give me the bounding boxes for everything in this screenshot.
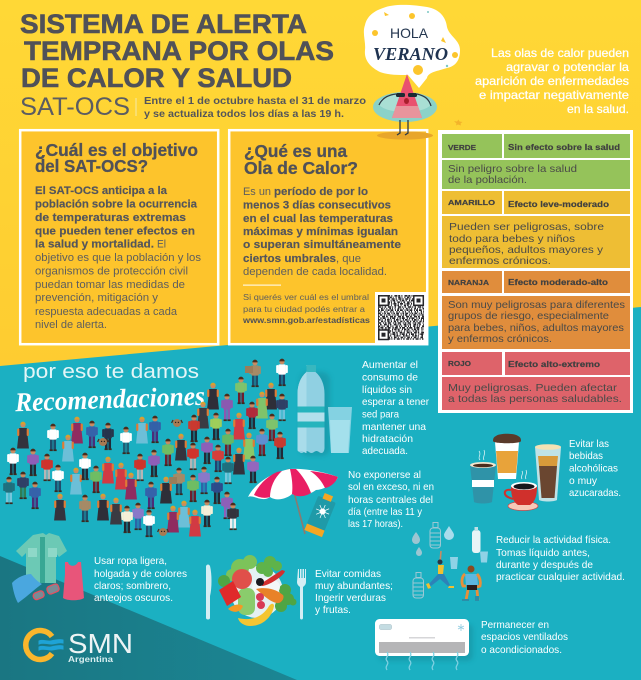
row: rojo <box>442 352 630 410</box>
text: liquidos: sed para <box>362 410 399 420</box>
row: verde <box>442 134 630 189</box>
text: objetivo body: que pueden tener efectos en <box>35 226 195 238</box>
decoration: small star <box>454 120 462 126</box>
icon: exercising woman <box>426 551 454 589</box>
text: sol: sol en exceso, ni en <box>348 482 434 493</box>
text: espacios: o acondicionados. <box>481 645 562 656</box>
text: liquidos: líquidos sin <box>362 385 412 396</box>
heading: ola de calor: Ola de Calor? <box>244 158 358 178</box>
text: ola de calor body: período de por lo <box>274 186 369 198</box>
row: naranja: grupos de riesgo, especialmente <box>448 311 609 322</box>
text: heat waves note: aparición de enfermedades <box>475 74 629 88</box>
row: amarillo: Efecto leve-moderado <box>508 199 609 209</box>
text: objetivo body: El <box>157 238 166 250</box>
text: comidas: y frutas. <box>315 605 351 616</box>
text: comidas <box>315 569 393 616</box>
row: naranja: para bebes, niños, adultos mayores <box>448 323 624 334</box>
icon: bottles, drops and glasses <box>412 522 488 598</box>
icon: glass of water <box>328 407 352 453</box>
icon: beach umbrella <box>248 469 338 534</box>
text: ropa: claros; sombrero, <box>94 581 171 592</box>
icon: sunscreen <box>304 491 338 537</box>
text: bebidas: bebidas <box>569 451 603 462</box>
logo: SMN Argentina <box>26 628 133 664</box>
text: liquidos <box>362 360 430 457</box>
row: rojo: Muy peligrosas. Pueden afectar <box>448 383 618 394</box>
icon: clothes <box>12 533 84 603</box>
QR code <box>375 292 428 345</box>
title: DE CALOR Y SALUD <box>21 63 292 93</box>
text: objetivo body: población sobre la ocurrencia <box>35 198 197 210</box>
text: bebidas <box>569 439 621 499</box>
text: liquidos: adecuada. <box>362 446 408 457</box>
table: alert levels <box>438 130 633 413</box>
text: heat waves note: agravar o potenciar la <box>506 60 629 74</box>
text: ola de calor body <box>243 186 401 278</box>
icon: salad plate <box>218 555 296 626</box>
text: sol: las 17 horas). <box>348 519 403 530</box>
text: ola de calor body: ciertos umbrales <box>243 253 336 265</box>
text: comidas: muy abundantes; <box>315 581 393 592</box>
text: umbral link <box>242 293 371 325</box>
row: rojo: Efecto alto-extremo <box>508 359 600 369</box>
panel: objetivo del SAT-OCS <box>20 130 218 344</box>
text: comidas: Evitar comidas <box>315 569 381 580</box>
row: amarillo: enfermos crónicos. <box>449 256 551 267</box>
row: verde: Sin peligro sobre la salud <box>448 164 577 175</box>
text: ola de calor body: máximas y mínimas igualan <box>243 226 398 238</box>
text: heat waves note: Las olas de calor pueden <box>491 46 629 60</box>
illustration: crowd of people <box>3 359 288 537</box>
text: heat waves note <box>475 46 629 116</box>
row: amarillo: pequeños, adultos mayores y <box>449 245 604 256</box>
text: bebidas: alcohólicas <box>569 464 618 474</box>
text: ola de calor body: menos 3 días consecutivos <box>243 200 391 212</box>
row: naranja: y enfermos crónicos. <box>448 334 552 345</box>
subtitle: y se actualiza todos los días a las 19 h. <box>144 108 344 120</box>
text: objetivo body: la salud y mortalidad. <box>35 238 154 250</box>
heading: objetivo <box>35 140 198 176</box>
text: objetivo body: puedan tomar las medidas de <box>35 279 185 291</box>
row: naranja: Efecto moderado-alto <box>508 277 608 287</box>
row: verde: de la población. <box>448 175 527 186</box>
heading: por eso te damos: por eso te damos <box>23 361 199 383</box>
text: ropa: holgada y de colores <box>94 569 187 580</box>
text: ropa <box>94 556 187 604</box>
heading: objetivo: ¿Cuál es el objetivo <box>35 140 198 160</box>
text: espacios: Permanecer en <box>481 620 549 631</box>
text: ola de calor body: dependen de cada localidad. <box>243 266 387 278</box>
text: objetivo body: objetivo es que la población y los <box>35 252 201 264</box>
row: naranja: NARANJA <box>448 278 490 287</box>
text: umbral link: para tu ciudad podés entrar a <box>243 305 366 314</box>
text: bebidas: Evitar las <box>569 439 609 450</box>
text: heat waves note: en la salud. <box>567 102 629 116</box>
row: rojo: ROJO <box>448 359 471 368</box>
illustration: hola verano bubble <box>364 5 460 88</box>
title <box>20 9 334 93</box>
logo: SMN Argentina: Argentina <box>68 654 113 664</box>
title: TEMPRANA POR OLAS <box>24 36 334 66</box>
illustration: hola verano bubble: HOLA <box>390 25 429 41</box>
heading: ola de calor: ¿Qué es una <box>244 141 347 161</box>
row: amarillo: todo para bebes y niños <box>449 234 575 245</box>
text: objetivo body: nivel de alerta. <box>35 319 107 331</box>
text: sol: No exponerse al <box>348 470 421 481</box>
row: amarillo <box>442 191 630 268</box>
heading: SAT-OCS: SAT-OCS <box>20 93 130 121</box>
text: liquidos: hidratación <box>362 434 413 445</box>
text: sol <box>348 470 434 530</box>
text: actividad fisica: practicar cualquier actividad. <box>496 572 625 583</box>
logo: SMN Argentina: SMN <box>68 628 133 659</box>
text: actividad fisica: Reducir la actividad física. <box>496 535 611 546</box>
background: dark teal corner <box>0 556 297 680</box>
row: amarillo: AMARILLO <box>448 198 495 207</box>
row: verde: Sin efecto sobre la salud <box>508 142 620 152</box>
text: heat waves note: e impactar negativamente <box>479 88 629 102</box>
text: actividad fisica <box>496 535 625 583</box>
row: verde: VERDE <box>448 143 476 152</box>
icon: red coffee cup <box>505 470 538 510</box>
text: espacios <box>481 620 568 656</box>
row: rojo: a todas las personas saludables. <box>448 394 622 405</box>
text: liquidos: Aumentar el <box>362 360 418 371</box>
text: objetivo body: de temperaturas extremas <box>35 212 186 224</box>
text: objetivo body: organismos de protección civil <box>35 266 188 278</box>
text: objetivo body: respuesta adecuadas a cada <box>35 306 177 318</box>
illustration: hola verano bubble: VERANO <box>373 44 448 64</box>
text: bebidas: o muy <box>569 476 598 487</box>
icon: air conditioner <box>375 619 473 670</box>
text: ola de calor body: o superan simultáneamente <box>243 239 401 251</box>
icon: layered drink glass <box>535 444 561 502</box>
illustration: float shadow and legs <box>377 120 433 140</box>
text: ropa: anteojos oscuros. <box>94 593 173 604</box>
text: liquidos: esperar a tener <box>362 397 430 408</box>
text: objetivo body: El SAT-OCS anticipa a la <box>35 185 167 197</box>
background: teal band <box>0 307 641 680</box>
row: amarillo: Pueden ser peligrosas, sobre <box>449 222 604 233</box>
icon: takeaway coffee <box>493 434 521 479</box>
heading: ola de calor <box>244 141 358 178</box>
text: ropa: Usar ropa ligera, <box>94 556 167 567</box>
icon: teal coffee cup <box>470 450 496 504</box>
text: bebidas: azucaradas. <box>569 488 621 499</box>
heading: objetivo: del SAT-OCS? <box>35 156 148 176</box>
icon: fork <box>297 569 306 620</box>
row: naranja <box>442 271 630 349</box>
icon: knife <box>206 564 212 620</box>
row: naranja: Son muy peligrosas para diferentes <box>448 300 625 311</box>
text: liquidos: mantener una <box>362 422 426 433</box>
text: comidas: Ingerir verduras <box>315 593 386 604</box>
text: ola de calor body: Es un <box>243 186 271 198</box>
text: sol: horas centrales del <box>348 495 433 506</box>
subtitle: Entre el 1 de octubre hasta el 31 de marzo <box>144 95 366 107</box>
panel: ola de calor <box>229 130 428 345</box>
text: objetivo body: prevención, mitigación y <box>35 292 159 304</box>
text: umbral link: www.smn.gob.ar/estadísticas <box>242 316 371 325</box>
illustration: watermelon on float <box>373 74 437 122</box>
text: sol: día (entre las 11 y <box>348 507 423 518</box>
text: actividad fisica: durante y después de <box>496 560 593 571</box>
heading: Recomendaciones: Recomendaciones <box>14 381 205 417</box>
text: umbral link: Si querés ver cuál es el umbral <box>243 293 369 302</box>
icon: water bottle <box>298 365 330 456</box>
text: ola de calor body: en el cual las temperaturas <box>243 213 393 225</box>
text: objetivo body <box>35 185 201 331</box>
text: espacios: espacios ventilados <box>481 632 568 643</box>
text: liquidos: consumo de <box>362 372 418 384</box>
title: SISTEMA DE ALERTA <box>20 9 307 39</box>
text: ola de calor body: , que <box>336 253 361 265</box>
subtitle <box>144 95 366 120</box>
icon: seated man <box>462 566 480 601</box>
text: actividad fisica: Tomas líquido antes, <box>496 548 590 559</box>
